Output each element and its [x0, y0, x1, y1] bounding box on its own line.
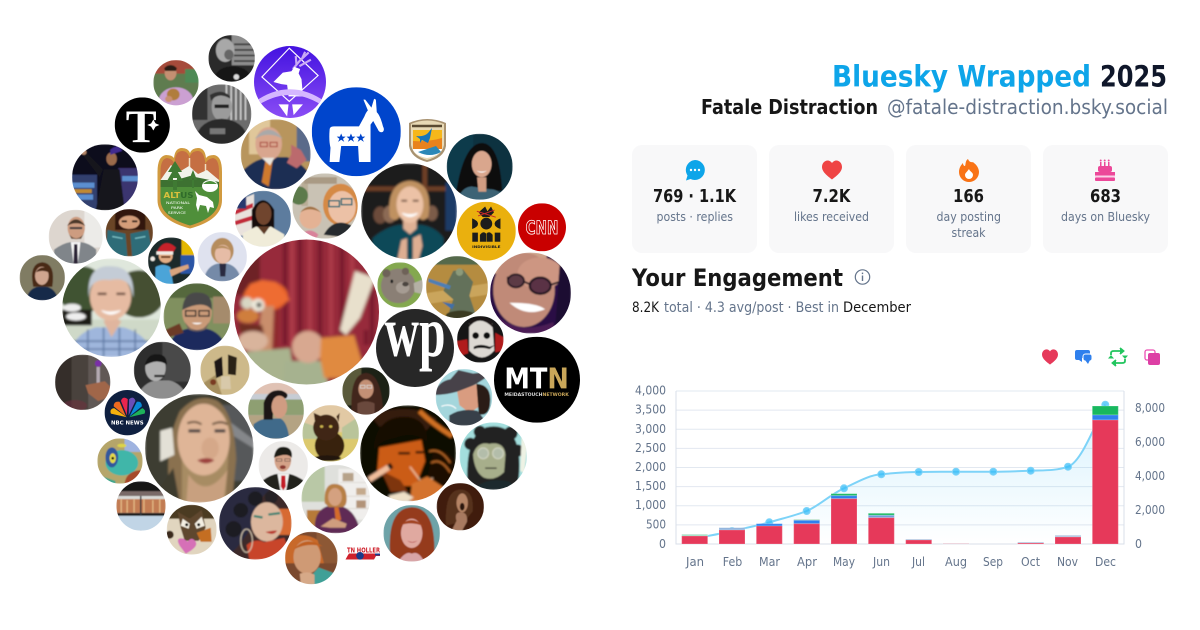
- avatar: purple deer logo: [254, 46, 326, 118]
- avatar: New York Times logo: T: [126, 102, 157, 153]
- avatar: man in grey suit: [49, 210, 103, 264]
- avatar: man on stage: [72, 144, 138, 210]
- avatar: painted miniature: [426, 256, 488, 320]
- avatar: Tina Smith: [198, 232, 247, 281]
- avatar: woman selfie: [145, 394, 254, 503]
- right axis labels: 6,000: [1135, 435, 1165, 449]
- stat label second line: streak: [952, 225, 986, 240]
- month labels: Nov: [1057, 555, 1078, 569]
- right axis labels: 4,000: [1135, 469, 1165, 483]
- avatar: curly hair sketch: [460, 422, 527, 490]
- month labels: Jan: [685, 555, 704, 569]
- month labels: [685, 555, 1116, 569]
- stat label: day posting: [936, 209, 1001, 224]
- month labels: Jul: [911, 555, 925, 569]
- avatar: woman with dark bob: [20, 255, 65, 300]
- avatar: black and white man: [134, 342, 191, 399]
- icon: replies legend: [1075, 350, 1092, 364]
- month labels: Mar: [759, 555, 780, 569]
- avatar: smoker illustration: [360, 405, 456, 501]
- avatar: woman with red hair: [383, 505, 440, 562]
- avatar: TN Holler logo: [346, 546, 380, 560]
- stacked monthly bars: [682, 406, 1118, 544]
- avatar: woman with flag: [235, 191, 291, 247]
- engagement chart: [635, 384, 1165, 569]
- avatar: woman with long black hair: [447, 134, 513, 200]
- right axis labels: 8,000: [1135, 401, 1165, 415]
- cumulative points: [728, 401, 1109, 534]
- panel: day posting streak stat: [906, 145, 1031, 253]
- engagement summary text: total · 4.3 avg/post · Best in: [664, 300, 839, 316]
- avatar: man with glasses purple tint: [490, 252, 571, 334]
- left axis labels: 1,000: [635, 498, 666, 512]
- month labels: Sep: [983, 555, 1003, 569]
- month labels: May: [833, 555, 855, 569]
- icon: quotes legend: [1145, 350, 1160, 365]
- avatar: woman with orange hair: [285, 532, 338, 584]
- month labels: Feb: [723, 555, 742, 569]
- title: Bluesky Wrapped 2025: 2025: [1100, 60, 1167, 94]
- avatar: hand holding vial: [55, 355, 110, 411]
- avatar: Alt US National Park Service patch: PARK: [171, 205, 184, 210]
- avatar: New York Times logo: [115, 97, 170, 153]
- avatar: Beaker muppet: [234, 240, 379, 384]
- left axis labels: 2,000: [635, 460, 666, 474]
- month labels: Jun: [872, 555, 890, 569]
- avatar: CNN logo: CNN: [526, 218, 558, 239]
- avatar: TN Holler logo: TN HOLLER: [347, 546, 380, 554]
- avatar: cowboy illustration: [436, 369, 492, 426]
- stat value: 769 · 1.1K: [653, 186, 737, 207]
- engagement summary text: 8.2K: [632, 300, 660, 316]
- avatar: man with burger: [153, 60, 199, 106]
- avatar: grey portrait man: [208, 35, 255, 82]
- left axis labels: [635, 384, 666, 551]
- month labels: Apr: [797, 555, 817, 569]
- left axis labels: 2,500: [635, 441, 666, 455]
- icon: flame: [959, 159, 979, 182]
- avatar: MeidasTouch Network logo: MEIDASTOUCHNETWORK: [504, 392, 569, 398]
- avatar: Alt US National Park Service patch: SERVICE: [168, 210, 187, 215]
- icon: chat bubble: [686, 160, 705, 180]
- left axis labels: 4,000: [635, 384, 666, 398]
- icon: birthday cake: [1095, 160, 1115, 181]
- avatar: woman with scarf and denim: [248, 383, 304, 440]
- avatar: Washington Post logo: wp: [385, 292, 445, 372]
- avatar: child in santa hat: [148, 237, 196, 284]
- stat label: posts · replies: [656, 209, 733, 224]
- avatar: woman in purple by bookshelf: [301, 465, 370, 533]
- avatar: woman and child selfie: [290, 173, 358, 239]
- heading: Your Engagement: Your Engagement: [631, 264, 843, 292]
- avatar: black kitten painting: [302, 405, 359, 462]
- user name and handle: @fatale-distraction.bsky.social: [887, 95, 1168, 119]
- avatar: Indivisible logo: [457, 202, 516, 261]
- avatar: Democratic donkey logo: [312, 87, 401, 176]
- left axis labels: 500: [646, 518, 666, 532]
- user name and handle: Fatale Distraction: [701, 95, 878, 119]
- stat value: 7.2K: [812, 186, 851, 207]
- stat value: 166: [953, 186, 984, 207]
- right axis labels: [1135, 401, 1165, 551]
- avatar: man with red tie: [259, 441, 308, 490]
- avatar: Alt US National Park Service patch: NATIONAL: [166, 200, 191, 205]
- avatar: wombat illustration: [377, 262, 423, 308]
- avatar: cartoon owl with heart: [166, 505, 217, 555]
- month labels: Dec: [1095, 555, 1116, 569]
- left axis labels: 0: [659, 537, 666, 551]
- avatar: MeidasTouch Network logo: MTN: [504, 362, 569, 395]
- month labels: Aug: [945, 555, 967, 569]
- avatar: NBC News logo: NBC NEWS: [111, 421, 144, 427]
- panel: posts and replies stat: [632, 145, 757, 253]
- panel: likes received stat: [769, 145, 894, 253]
- avatar: Alt US National Park Service patch: [158, 148, 222, 228]
- avatar: Alt US National Park Service patch: ALTUS: [164, 191, 194, 200]
- stat label: likes received: [794, 209, 869, 224]
- avatar: Fish and Wildlife Service badge: [409, 119, 446, 162]
- stat label: days on Bluesky: [1061, 209, 1151, 224]
- avatar: vintage illustrated woman: [219, 487, 292, 560]
- engagement summary text: [632, 300, 911, 316]
- avatar: skull face man: [457, 316, 504, 363]
- avatar: Schumer pointing: [241, 119, 311, 189]
- icon: info: [855, 270, 870, 284]
- avatar: man with glasses black and white: [192, 84, 252, 144]
- avatar: Indivisible logo: INDIVISIBLE: [472, 245, 501, 249]
- title: Bluesky Wrapped 2025: Bluesky Wrapped: [832, 60, 1091, 94]
- avatar: smiling man with beard and glasses: [164, 283, 230, 350]
- left axis labels: 3,000: [635, 422, 666, 436]
- avatar: NBC News logo: [105, 390, 150, 435]
- cumulative line: [695, 405, 1105, 538]
- avatar cluster: [20, 35, 580, 584]
- icon: likes legend: [1042, 349, 1058, 365]
- avatar: comic fish creature: [97, 438, 143, 484]
- avatar: old map collage: [200, 346, 250, 395]
- right axis labels: 0: [1135, 537, 1142, 551]
- avatar: CNN logo: [518, 203, 566, 251]
- engagement summary text: December: [843, 300, 911, 316]
- avatar: George Takei: [58, 258, 165, 357]
- avatar: MeidasTouch Network logo: [494, 337, 580, 423]
- avatar: Washington Post logo: [376, 309, 454, 387]
- avatar: train window: [116, 481, 166, 531]
- cumulative area: [695, 405, 1105, 544]
- stat value: 683: [1090, 186, 1121, 207]
- icon: heart: [822, 160, 842, 180]
- avatar: dark photo man at microphone: [437, 483, 484, 530]
- chart legend icons: [1042, 348, 1160, 366]
- avatar: woman behind books: [106, 209, 153, 256]
- avatar: woman with glasses dark background: [342, 367, 390, 415]
- month labels: Oct: [1021, 555, 1040, 569]
- left axis labels: 3,500: [635, 402, 666, 416]
- panel: days on Bluesky stat: [1043, 145, 1168, 253]
- user name and handle: [701, 95, 1168, 119]
- left axis labels: 1,500: [635, 479, 666, 493]
- icon: reposts legend: [1108, 348, 1128, 366]
- right axis labels: 2,000: [1135, 503, 1165, 517]
- avatar: Kirsten Gillibrand: [361, 163, 457, 259]
